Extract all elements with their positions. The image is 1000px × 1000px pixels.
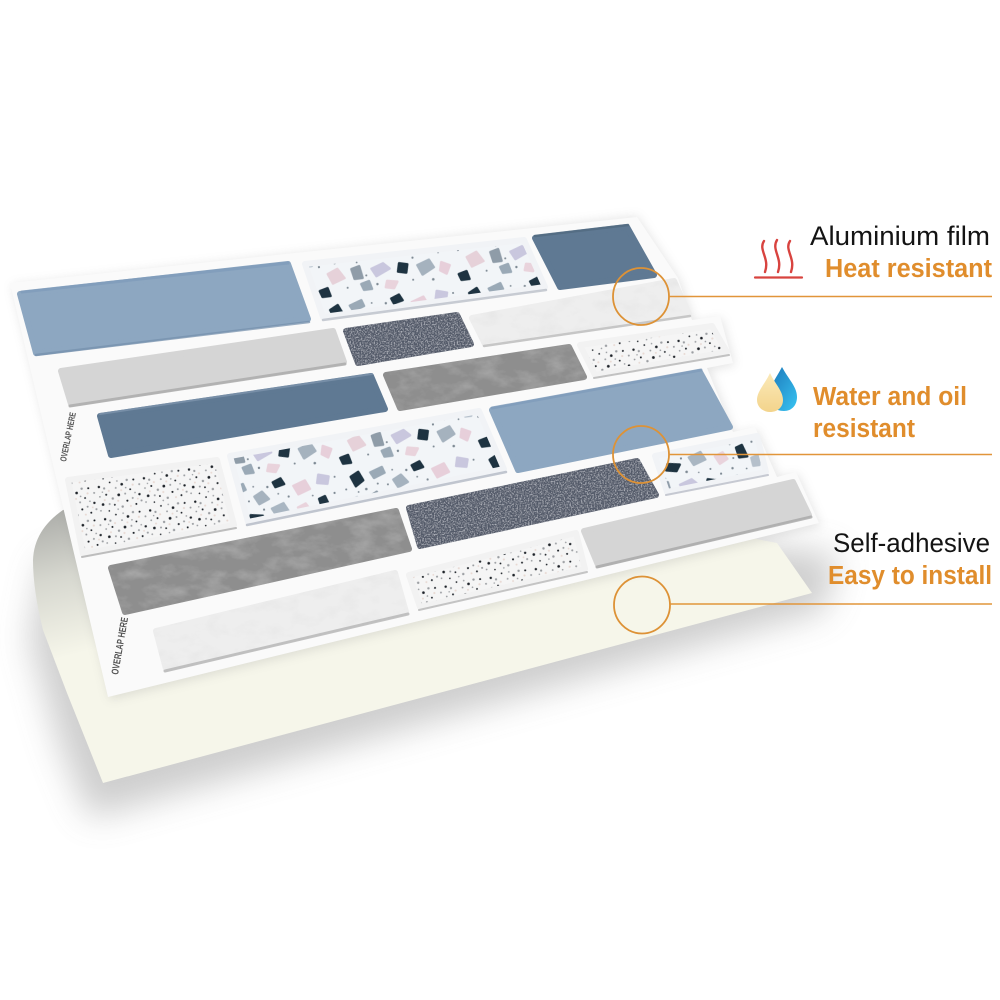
tile row 6: speckle xyxy=(409,533,587,610)
tile row 3: concrete xyxy=(386,347,584,408)
callout line xyxy=(670,603,992,605)
label: water and oil: Water and oil xyxy=(813,383,967,411)
tile row 4: light blue xyxy=(492,370,730,470)
tile row 1: light blue xyxy=(20,263,309,355)
tile row 2: white marble xyxy=(472,281,690,346)
panel: aluminium tile sheet xyxy=(10,217,819,697)
overlap label lower: OVERLAP HERE xyxy=(110,616,131,676)
tile row 4: speckle xyxy=(68,460,236,557)
tile row 5: granite long xyxy=(409,461,656,546)
callout circle xyxy=(614,576,670,634)
callout circle xyxy=(613,268,669,325)
callout: water and oil resistant xyxy=(613,367,992,483)
tile row 2: light gray xyxy=(61,331,345,406)
tile row 1: terrazzo xyxy=(305,240,546,320)
callout: aluminium film / heat resistant xyxy=(613,221,992,325)
backing sheet: self-adhesive layer xyxy=(33,450,812,783)
icon: water and oil drops xyxy=(757,367,797,412)
tile sheet shadow xyxy=(12,216,821,700)
sheet outline xyxy=(10,217,819,697)
label: heat resistant: Heat resistant xyxy=(825,255,992,283)
label: aluminium film: Aluminium film xyxy=(810,221,990,251)
tile row 2: granite xyxy=(346,315,471,363)
tile row 4: large terrazzo xyxy=(230,411,506,525)
callout line xyxy=(669,296,992,298)
backing drop shadow xyxy=(30,500,838,818)
callout line xyxy=(669,454,992,456)
overlap label upper: OVERLAP HERE xyxy=(58,411,78,462)
tile row 7: white marble xyxy=(156,573,408,671)
callout: self-adhesive / easy to install xyxy=(614,528,992,634)
label: resistant: resistant xyxy=(813,415,915,443)
tile row 3: fine speckle xyxy=(580,326,729,378)
tile row 1: dark blue xyxy=(535,225,654,287)
tile row 6: light gray xyxy=(584,482,811,567)
label: easy to install: Easy to install xyxy=(828,562,992,590)
callout circle xyxy=(613,426,669,483)
tile row 6: concrete xyxy=(111,511,409,612)
tile row 3: dark blue xyxy=(100,374,385,455)
tile row 5: small terrazzo xyxy=(655,436,768,495)
icon: heat waves xyxy=(755,240,802,278)
label: self-adhesive: Self-adhesive xyxy=(833,528,990,558)
